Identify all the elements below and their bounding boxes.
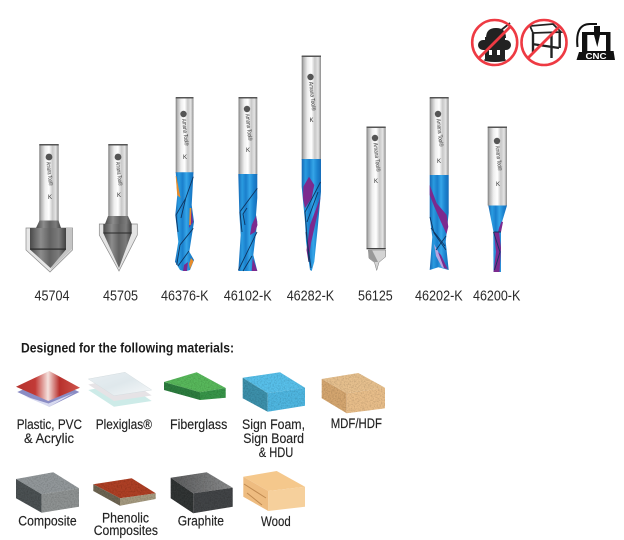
part number labels: 46200-K (473, 288, 521, 304)
router bit 45704: Amana Tool® (45, 161, 54, 186)
router bit 45705: Amana Tool® (114, 161, 124, 186)
swatch: plastic (16, 371, 80, 407)
router bit 56125: K (374, 179, 378, 185)
router bit 46202-K: Amana Tool® (435, 118, 444, 148)
material labels: Composite (18, 514, 77, 529)
material labels: Sign Board (243, 431, 304, 446)
heading: materials: Designed for the following materials: (21, 340, 234, 356)
part number labels: 46102-K (224, 288, 272, 304)
material labels: Plexiglas® (96, 417, 152, 432)
swatch: composite (16, 472, 79, 513)
icon: no handheld router (472, 20, 517, 65)
material labels: Fiberglass (170, 417, 228, 432)
part number labels (34, 288, 521, 304)
router bit 45705 (99, 144, 137, 271)
part number labels: 46282-K (287, 288, 334, 304)
router bit 46282-K: Amana Tool® (307, 81, 317, 112)
router bit 46200-K (488, 126, 507, 272)
swatch: wood (243, 471, 305, 511)
icon group: machine compatibility (472, 20, 615, 65)
material labels: Composites (94, 523, 158, 538)
material labels: & Acrylic (24, 431, 74, 446)
router bit 46102-K: K (246, 148, 250, 154)
icon: no router table (522, 20, 566, 65)
router bit 46200-K: K (496, 182, 500, 188)
swatch: MDF (322, 373, 385, 413)
swatch: sign foam (243, 372, 305, 412)
material labels: & HDU (259, 445, 293, 460)
material labels: Graphite (178, 514, 224, 529)
router bit 46282-K (302, 56, 321, 271)
router bit 46282-K: K (310, 118, 314, 124)
router bit 56125: Amana Tool® (372, 142, 382, 173)
material labels: Wood (261, 514, 291, 529)
material labels: Phenolic (102, 511, 149, 526)
router bit 46202-K: K (437, 159, 441, 165)
material labels: MDF/HDF (331, 416, 382, 431)
icon: CNC machine: CNC (586, 52, 607, 61)
materials swatches (16, 371, 385, 513)
router bit 46200-K: Amana Tool® (494, 145, 503, 171)
router bit 45704 (26, 144, 72, 272)
part number labels: 56125 (358, 288, 393, 304)
material labels: Sign Foam, (242, 417, 305, 432)
router bit 45705: K (117, 193, 121, 199)
router bit 46376-K: Amana Tool® (180, 118, 190, 146)
part number labels: 45705 (103, 288, 138, 304)
part number labels: 45704 (34, 288, 70, 304)
part number labels: 46376-K (161, 288, 209, 304)
router bit 46102-K: Amana Tool® (244, 113, 253, 141)
router bit 46376-K: K (183, 155, 187, 161)
router bit 45704: K (48, 195, 52, 201)
router bit 46202-K (430, 97, 449, 270)
material labels (17, 416, 382, 538)
material labels: Plastic, PVC (17, 417, 82, 432)
swatch: plexiglas (88, 372, 152, 407)
router bit 46376-K (175, 97, 194, 271)
icon: CNC machine (576, 24, 615, 61)
swatch: graphite (171, 472, 233, 513)
router bit 56125 (366, 126, 386, 270)
swatch: phenolic (93, 478, 156, 506)
part number labels: 46202-K (415, 288, 463, 304)
router bit 46102-K (238, 97, 258, 271)
swatch: fiberglass (164, 372, 226, 400)
